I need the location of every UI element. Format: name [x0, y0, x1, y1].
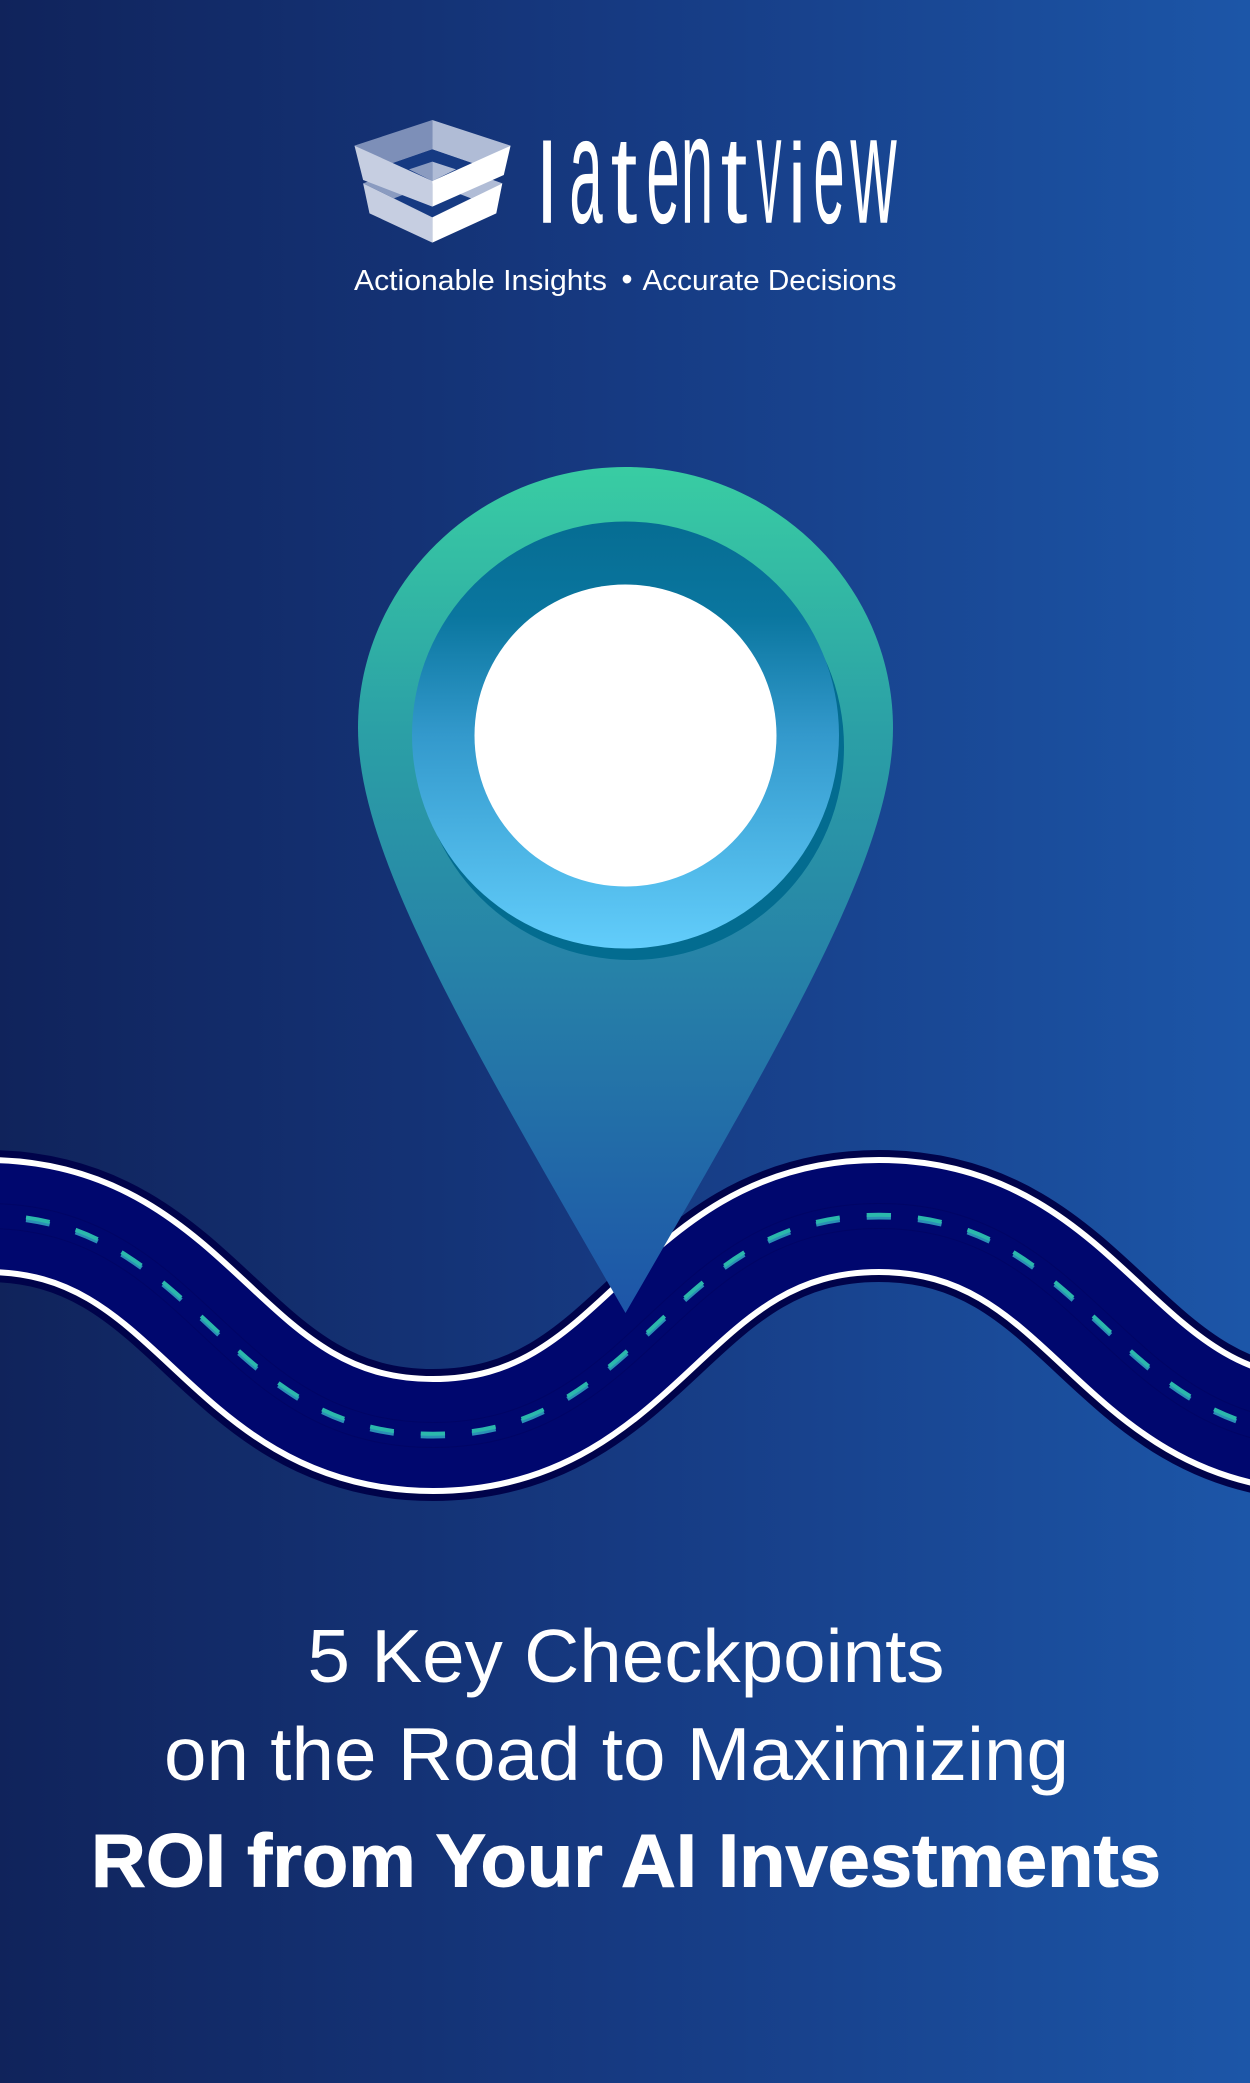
title line 1: 5 Key Checkpoints: [308, 1614, 945, 1698]
wordmark: l: [537, 120, 557, 247]
location pin: [358, 467, 893, 1313]
wordmark: v: [756, 81, 782, 256]
wordmark: t: [721, 112, 747, 250]
icon: layered cube: [354, 120, 511, 243]
white centre: [474, 584, 776, 886]
wordmark: w: [850, 83, 897, 257]
wordmark: [537, 81, 897, 257]
ring: [412, 522, 839, 948]
tagline: Actionable Insights: [354, 265, 607, 297]
wordmark: i: [788, 120, 806, 247]
wordmark: e: [646, 86, 680, 256]
tagline: •: [621, 261, 633, 297]
pin body: [358, 467, 893, 1313]
tagline: [354, 261, 896, 297]
lane dashes: [0, 1215, 1250, 1436]
tagline: Accurate Decisions: [642, 265, 896, 297]
wordmark: n: [681, 81, 713, 256]
logo: [354, 81, 897, 297]
wordmark: t: [611, 112, 637, 250]
ring shadow: [418, 534, 844, 960]
wordmark: a: [569, 86, 603, 256]
title line 3: ROI from Your AI Investments: [91, 1818, 1161, 1902]
road: [0, 1215, 1250, 1436]
title: [91, 1614, 1161, 1902]
title line 2: on the Road to Maximizing: [164, 1712, 1069, 1796]
wordmark: e: [813, 86, 845, 256]
